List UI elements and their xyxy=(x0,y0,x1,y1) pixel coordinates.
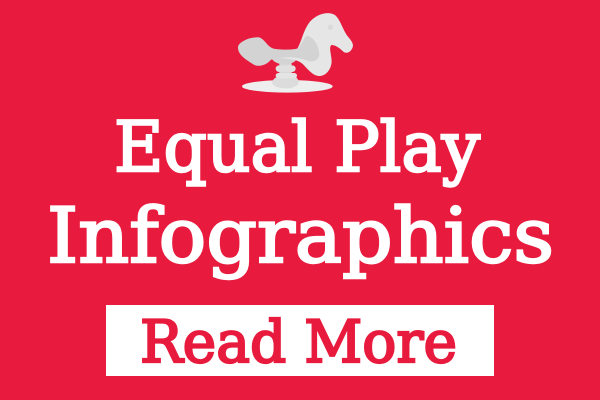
icon: spring rocking horse xyxy=(238,13,353,93)
title: Equal Play: Equal Play xyxy=(114,108,480,188)
title: Infographics: Infographics xyxy=(47,191,554,280)
button: Read More: Read More xyxy=(140,308,457,376)
